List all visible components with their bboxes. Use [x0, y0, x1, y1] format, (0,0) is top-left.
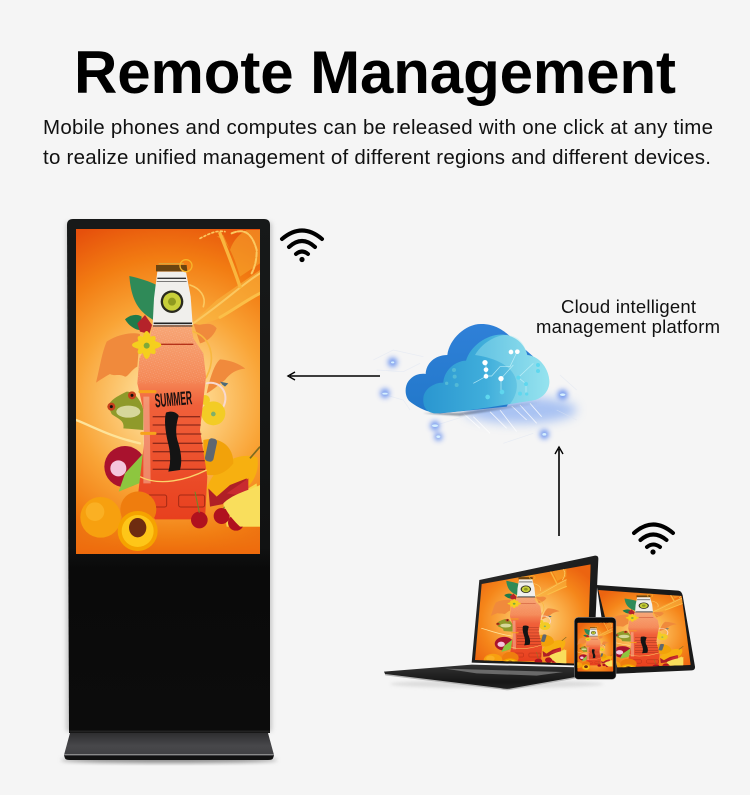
laptop [384, 556, 598, 690]
kiosk display [61, 219, 277, 763]
cloud platform label: management platform [536, 316, 720, 337]
subtitle text block [43, 116, 713, 169]
phone [573, 617, 616, 679]
laptop base [384, 665, 581, 690]
kiosk base [61, 732, 277, 763]
cloud platform label [536, 296, 720, 337]
circuit glow [373, 350, 577, 443]
subtitle text block: Mobile phones and computes can be released with one click at any time [43, 116, 713, 139]
arrow: cloud to kiosk [288, 372, 380, 380]
laptop screen poster [475, 564, 591, 664]
laptop lid [472, 556, 598, 666]
title: Remote Management [74, 39, 676, 106]
kiosk edge shadow [66, 222, 272, 732]
cloud front face [423, 335, 549, 413]
icon: wifi on devices [634, 524, 673, 555]
kiosk screen poster: SUMMER [154, 388, 193, 412]
cloud shadow [423, 401, 542, 416]
kiosk body [67, 219, 270, 733]
network nodes [380, 358, 568, 441]
cloud circuit lights [445, 349, 540, 399]
cloud platform label: Cloud intelligent [561, 296, 696, 317]
icon: wifi on kiosk [282, 230, 322, 262]
tablet [593, 585, 695, 675]
kiosk screen poster [76, 229, 260, 554]
arrow: devices to cloud [555, 447, 563, 536]
devices group [384, 556, 695, 690]
subtitle text block: to realize unified management of different regions and different devices. [43, 146, 711, 169]
device shadow [390, 680, 603, 688]
cloud illustration [373, 324, 577, 443]
cloud back face [406, 324, 533, 413]
